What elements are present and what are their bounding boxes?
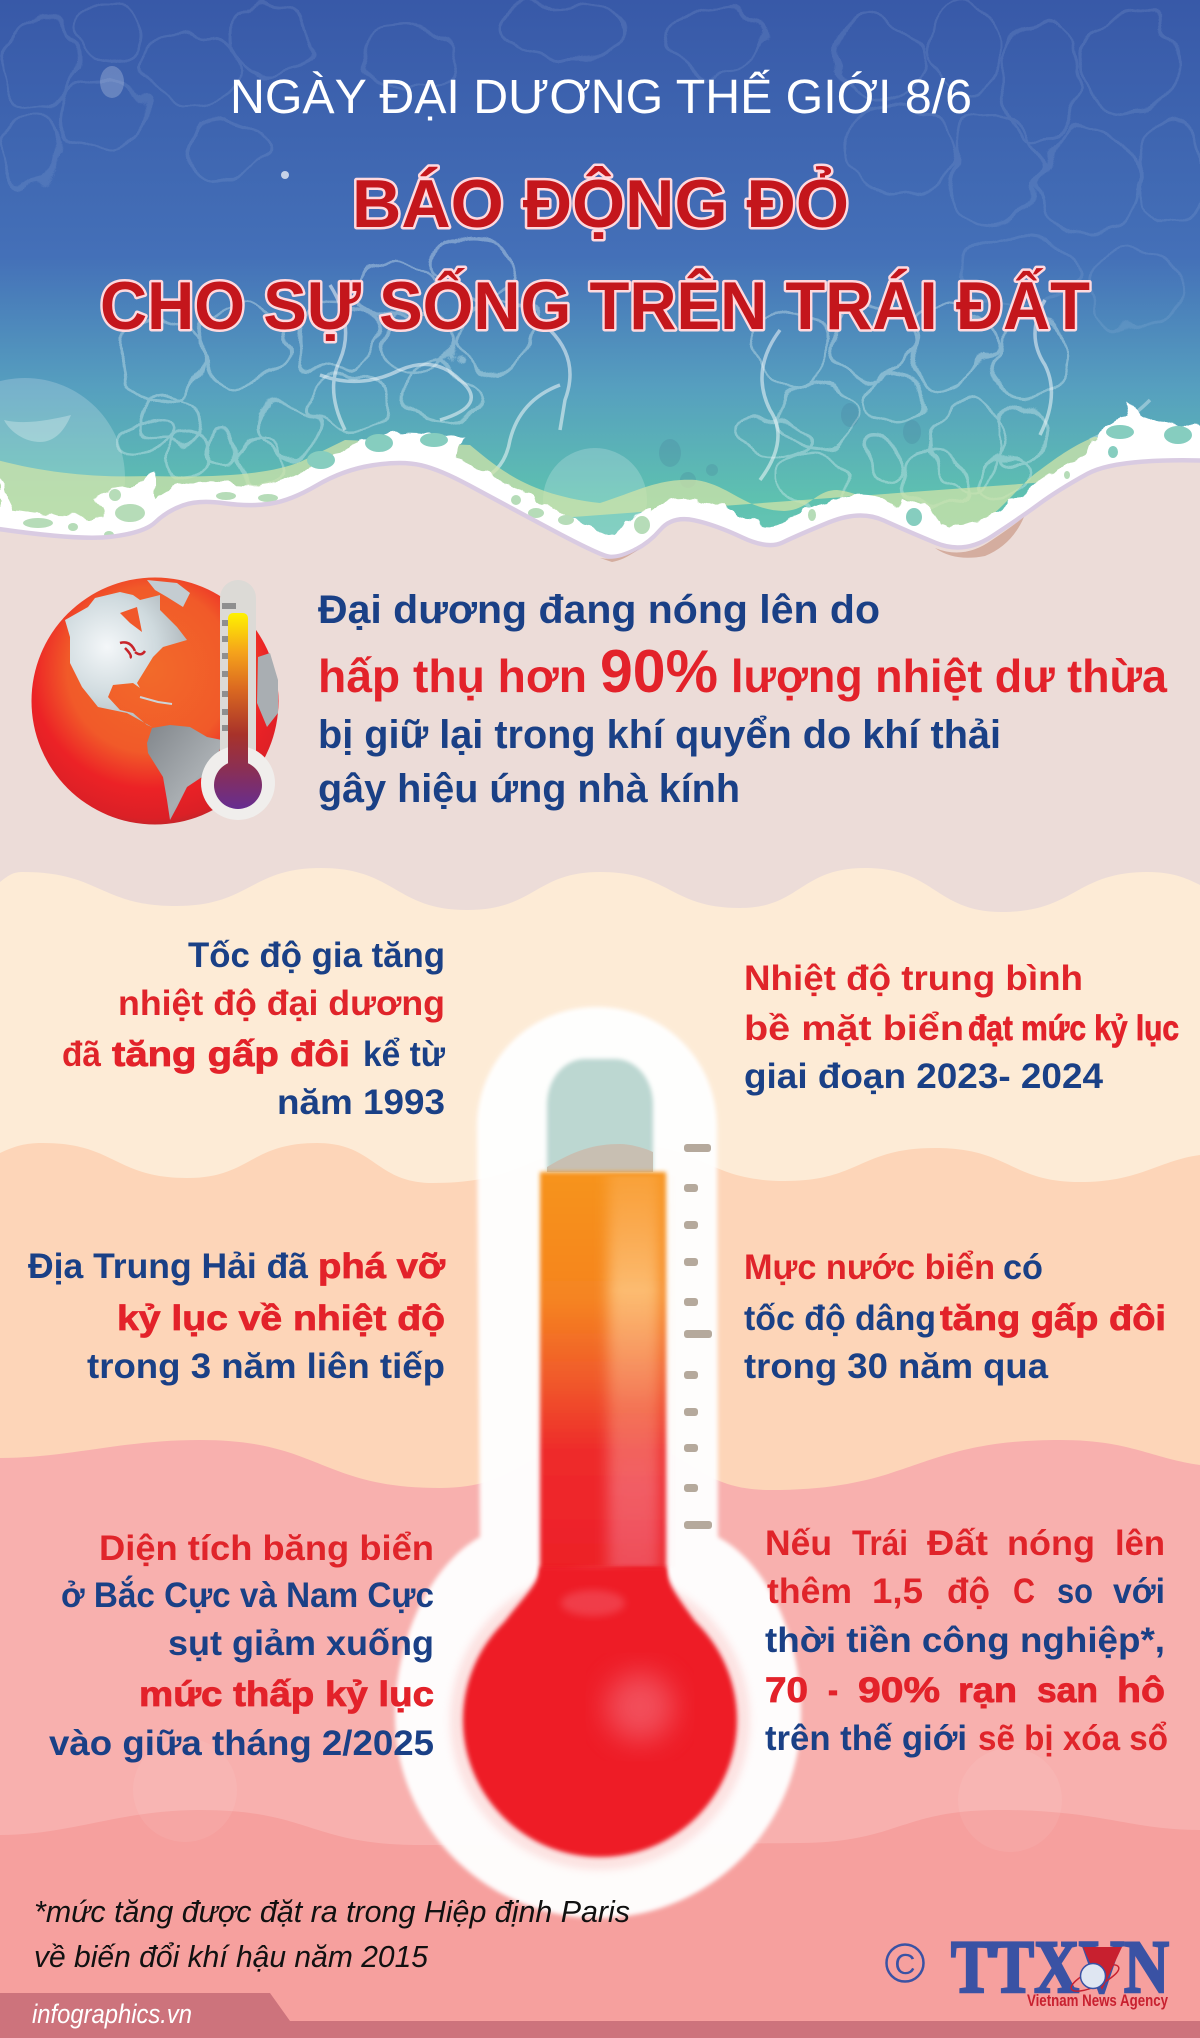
text block: coral reefs — [765, 1524, 1168, 1758]
text block: coral reefs: - — [828, 1671, 838, 1710]
footnote — [34, 1894, 630, 1974]
panel: peach band — [0, 1143, 1200, 1600]
panel: deep pink band — [0, 1810, 1200, 2038]
dark specks — [659, 403, 921, 488]
icon: globe with thermometer — [32, 578, 278, 824]
text block: coral reefs: sẽ bị xóa sổ — [978, 1719, 1168, 1758]
text block: ocean warming rate: nhiệt độ đại dương — [118, 984, 445, 1023]
text block: sea surface temperature — [744, 959, 1179, 1096]
source link: infographics.vn — [32, 1999, 192, 2029]
text block: intro: hấp thụ hơn — [318, 650, 587, 702]
text block: sea ice: ở Bắc Cực và Nam Cực — [61, 1575, 434, 1615]
mini thermometer — [201, 580, 275, 820]
text block: sea level: tăng gấp đôi — [940, 1299, 1166, 1338]
text block: coral reefs: trên thế giới — [765, 1719, 967, 1758]
text block: ocean warming rate: năm 1993 — [277, 1083, 445, 1122]
panel: ocean header — [0, 0, 1200, 578]
text block: sea level: tốc độ dâng — [744, 1299, 936, 1338]
text block: coral reefs: độ — [947, 1572, 990, 1611]
lavender edge — [0, 462, 1200, 558]
text block: sea surface temperature: Nhiệt độ trung bình — [744, 959, 1083, 998]
text block: coral reefs: với — [1113, 1572, 1165, 1611]
text block: sea ice: mức thấp kỷ lục — [139, 1675, 434, 1714]
text block: Mediterranean: kỷ lục về nhiệt độ — [117, 1299, 445, 1338]
shoreline foam — [0, 403, 1200, 600]
faint bubbles — [133, 1738, 1062, 1852]
text block: sea level — [744, 1248, 1166, 1386]
panel: pink band — [0, 1440, 1200, 1860]
text block: coral reefs: so — [1057, 1572, 1093, 1611]
text block: Mediterranean: trong 3 năm liên tiếp — [87, 1347, 445, 1386]
foam holes — [23, 471, 1070, 539]
globe — [32, 578, 278, 824]
glass top — [547, 1059, 653, 1172]
title: BÁO ĐỘNG ĐỎ — [352, 165, 849, 242]
footer bar — [0, 1993, 1200, 2038]
text block: intro: Đại dương đang nóng lên do — [318, 588, 880, 632]
text block: coral reefs: 90% — [858, 1671, 940, 1710]
text block: ocean warming rate: kể từ — [363, 1035, 446, 1074]
text block: coral reefs: C — [1013, 1572, 1035, 1611]
subtitle: NGÀY ĐẠI DƯƠNG THẾ GIỚI 8/6 — [230, 70, 972, 124]
text block: intro: bị giữ lại trong khí quyển do khí thải — [318, 713, 1001, 757]
text block: coral reefs: lên — [1115, 1524, 1165, 1563]
text block: sea ice: Diện tích băng biển — [99, 1529, 434, 1568]
text block: coral reefs: Nếu — [765, 1524, 832, 1563]
text block: coral reefs: hô — [1117, 1671, 1165, 1710]
text block: coral reefs: Trái — [852, 1524, 908, 1563]
text block: coral reefs: nóng — [1007, 1524, 1095, 1563]
text block: ocean warming rate: đã — [62, 1035, 101, 1074]
text block: intro: gây hiệu ứng nhà kính — [318, 767, 740, 811]
lime shallows — [0, 437, 1200, 560]
panel: cream band — [0, 868, 1200, 1300]
translucent bubbles — [0, 66, 647, 578]
bulb halo — [450, 1570, 750, 1870]
thermometer — [395, 1007, 801, 1918]
tick marks — [684, 1144, 712, 1529]
text block: Mediterranean: phá vỡ — [318, 1247, 445, 1286]
text block: sea level: trong 30 năm qua — [744, 1347, 1049, 1386]
text block: coral reefs: 1,5 — [872, 1572, 923, 1611]
text block: sea surface temperature: giai đoạn 2023- 2024 — [744, 1057, 1104, 1096]
text block: ocean warming rate: Tốc độ gia tăng — [188, 936, 445, 975]
bulb highlights — [561, 1590, 674, 1741]
text block: intro: lượng nhiệt dư thừa — [731, 650, 1167, 702]
water caustics upper — [0, 0, 1200, 325]
text block: ocean warming rate: tăng gấp đôi — [112, 1035, 350, 1074]
text block: coral reefs: Đất — [927, 1524, 988, 1563]
text block: sea surface temperature: bề mặt biển — [744, 1009, 964, 1048]
bulb — [463, 1567, 737, 1857]
wet sand — [0, 463, 1200, 600]
text block: coral reefs: san — [1037, 1671, 1098, 1710]
water caustics lower — [117, 233, 1066, 508]
text block: sea level: có — [1003, 1248, 1043, 1287]
text block: sea level: Mực nước biển — [744, 1248, 995, 1287]
text block: Mediterranean — [28, 1247, 445, 1386]
title: CHO SỰ SỐNG TRÊN TRÁI ĐẤT — [100, 267, 1090, 344]
footnote: *mức tăng được đặt ra trong Hiệp định Paris — [34, 1894, 630, 1929]
column highlight — [608, 1176, 660, 1567]
text block: sea ice — [49, 1529, 434, 1763]
footnote: về biến đổi khí hậu năm 2015 — [34, 1939, 429, 1974]
title — [100, 165, 1090, 344]
text block: Mediterranean: Địa Trung Hải đã — [28, 1247, 309, 1286]
text block: sea ice: sụt giảm xuống — [168, 1624, 434, 1663]
text block: coral reefs: rạn — [958, 1671, 1017, 1710]
logo: TTXVN: C — [895, 1949, 915, 1981]
mercury column — [540, 1172, 666, 1602]
wave in glass — [547, 1144, 653, 1172]
text block: coral reefs: thêm — [767, 1572, 852, 1611]
text block: intro — [318, 588, 1167, 811]
white foam band and crests — [0, 403, 1200, 560]
text block: ocean warming rate — [62, 936, 446, 1122]
background: sand — [0, 400, 1200, 920]
text block: sea ice: vào giữa tháng 2/2025 — [49, 1724, 434, 1763]
white shell — [395, 1007, 801, 1918]
text block: intro: 90% — [600, 638, 718, 705]
logo: TTXVN — [886, 1926, 1169, 2010]
text block: coral reefs: thời tiền công nghiệp*, — [765, 1621, 1165, 1660]
stronger foam veins — [320, 285, 1150, 480]
text block: coral reefs: 70 — [765, 1671, 808, 1710]
